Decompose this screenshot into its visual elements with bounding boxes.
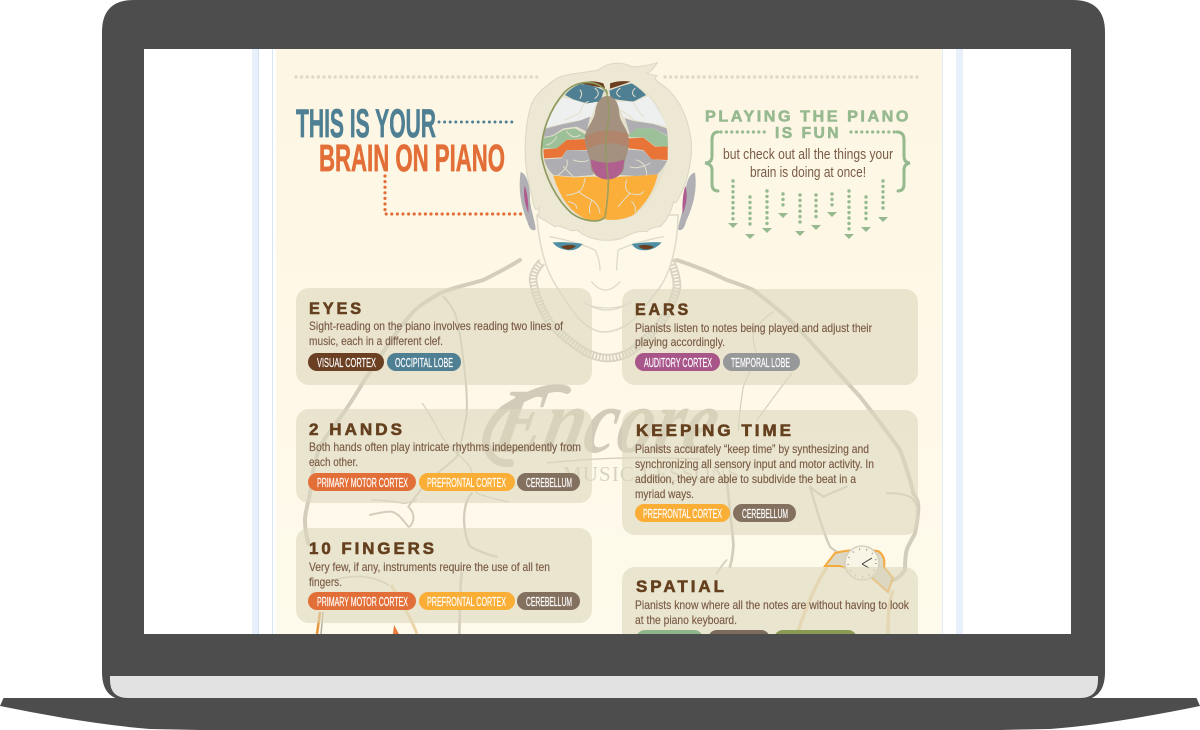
body text	[635, 322, 872, 349]
body text: Pianists listen to notes being played and adjust their	[635, 322, 872, 335]
occipital blue left	[565, 84, 604, 103]
logo: Encore Music Lessons: Encore	[485, 371, 729, 473]
eye: right	[632, 242, 662, 250]
brain	[541, 81, 668, 221]
gray lower right	[620, 149, 667, 176]
heading: 10 FINGERS	[309, 539, 437, 558]
body text: addition, they are able to subdivide the beat in a	[635, 473, 856, 486]
subheading: playing the piano is fun: IS FUN	[775, 125, 841, 142]
panel: 2 hands	[296, 409, 592, 503]
subheading: playing the piano is fun	[705, 108, 911, 142]
cerebellum pear	[585, 96, 629, 179]
eye: left	[553, 242, 583, 250]
top dotted rules	[296, 75, 920, 79]
screen background	[144, 49, 1071, 634]
gray left	[543, 117, 590, 137]
body text: music, each in a different clef.	[309, 335, 443, 348]
tag: prefrontal cortex: PREFRONTAL CORTEX	[427, 476, 506, 490]
tag: cerebellum	[517, 592, 580, 610]
subheading: playing the piano is fun: PLAYING THE PIANO	[705, 108, 911, 126]
tag: cerebellum: CEREBELLUM	[526, 595, 572, 609]
green right	[628, 128, 668, 147]
gray right	[625, 118, 668, 136]
body text: at the piano keyboard.	[635, 614, 737, 627]
tag: visual cortex: VISUAL CORTEX	[317, 356, 376, 370]
tag: primary motor cortex	[308, 473, 416, 491]
body text	[309, 441, 581, 469]
body text: Very few, if any, instruments require the use of all ten	[309, 561, 550, 574]
laptop: base	[0, 698, 1200, 730]
gray lower left	[544, 150, 593, 177]
left shoulder and arm	[305, 260, 520, 633]
tag: prefrontal cortex	[419, 592, 515, 610]
panel: keeping time	[622, 410, 918, 535]
tag: temporal lobe	[723, 353, 800, 371]
tags (cropped)	[636, 630, 857, 648]
body text: fingers.	[309, 576, 342, 589]
logo: Encore Music Lessons: MUSIC LESSONS	[563, 462, 739, 486]
tag: occipital lobe	[387, 353, 461, 371]
body text: playing accordingly.	[635, 336, 725, 349]
body text: Both hands often play intricate rhythms independently from	[309, 441, 581, 454]
body text: Sight-reading on the piano involves reading two lines of	[309, 320, 564, 333]
tag: auditory cortex: AUDITORY CORTEX	[644, 356, 712, 370]
tag: cerebellum	[517, 473, 580, 491]
body text: Pianists know where all the notes are without having to look	[635, 599, 909, 612]
tag: occipital lobe: OCCIPITAL LOBE	[395, 356, 453, 370]
heading: SPATIAL	[636, 577, 727, 596]
intro text: but check out all the things your	[723, 147, 893, 163]
intro text: brain is doing at once!	[750, 165, 866, 181]
body text: each other.	[309, 456, 358, 469]
figure: head with brain	[520, 63, 696, 310]
body text	[309, 320, 564, 348]
tag: visual cortex	[308, 353, 384, 371]
ear: left	[520, 172, 536, 230]
tag: cerebellum	[733, 504, 796, 522]
top: brown	[580, 81, 605, 88]
tag: auditory cortex	[635, 353, 720, 371]
tag: cerebellum: CEREBELLUM	[526, 476, 572, 490]
illustration: wrist watch	[797, 546, 893, 634]
infographic page background	[276, 49, 942, 634]
right shoulder and arm	[677, 260, 918, 580]
yellow right	[605, 174, 658, 220]
body text: synchronizing all sensory input and motor activity. In	[635, 458, 874, 471]
midline	[605, 89, 609, 217]
tag: primary motor cortex: PRIMARY MOTOR CORTEX	[317, 595, 408, 609]
body text	[309, 561, 550, 589]
orange right	[628, 138, 668, 160]
laptop: silver lip	[110, 676, 1098, 698]
illustration: left wrist bracelet	[317, 585, 417, 634]
title: THIS IS YOUR	[296, 102, 436, 146]
hair	[525, 63, 692, 240]
page column edges	[252, 49, 963, 634]
tag: primary motor cortex: PRIMARY MOTOR CORTEX	[317, 476, 408, 490]
title: BRAIN ON PIANO	[319, 138, 505, 180]
heading: EARS	[635, 300, 691, 319]
tag: prefrontal cortex	[635, 504, 730, 522]
panel: spatial	[622, 567, 918, 657]
veins	[547, 88, 650, 213]
top right: brown	[610, 81, 631, 89]
auditory pink	[591, 159, 624, 179]
heading: EYES	[309, 299, 364, 318]
brain base	[541, 82, 668, 221]
connector: blue dotted line	[439, 120, 516, 124]
panel: eyes	[296, 288, 592, 385]
yellow left	[553, 176, 607, 220]
figure: pianist body line art	[305, 215, 918, 633]
tag: prefrontal cortex: PREFRONTAL CORTEX	[427, 595, 506, 609]
face outline	[537, 215, 678, 332]
collar	[533, 260, 677, 358]
occipital blue right	[609, 83, 646, 102]
band in pear	[586, 130, 629, 149]
ear: right	[678, 173, 696, 230]
tag: prefrontal cortex	[419, 473, 515, 491]
heading: 2 HANDS	[309, 420, 405, 439]
intro text	[723, 147, 893, 181]
orange left	[543, 139, 587, 158]
outline left olive	[541, 82, 607, 221]
panel: ears	[622, 289, 918, 385]
body text: Pianists accurately “keep time” by synthesizing and	[635, 443, 869, 456]
dotted arrows	[728, 181, 888, 239]
tag: cerebellum: CEREBELLUM	[742, 507, 788, 521]
title	[296, 102, 505, 180]
green left	[542, 128, 587, 148]
body text	[635, 443, 874, 501]
tag: temporal lobe: TEMPORAL LOBE	[731, 356, 790, 370]
braces with dotted tops	[705, 132, 910, 191]
panel: 10 fingers	[296, 528, 592, 623]
heading: KEEPING TIME	[636, 421, 794, 440]
body text	[635, 599, 909, 627]
connector: orange dotted line	[385, 176, 524, 214]
tag: primary motor cortex	[308, 592, 416, 610]
tag: prefrontal cortex: PREFRONTAL CORTEX	[643, 507, 722, 521]
white right	[617, 96, 667, 127]
face details	[550, 237, 663, 310]
body text: myriad ways.	[635, 488, 694, 501]
white left	[545, 97, 597, 128]
